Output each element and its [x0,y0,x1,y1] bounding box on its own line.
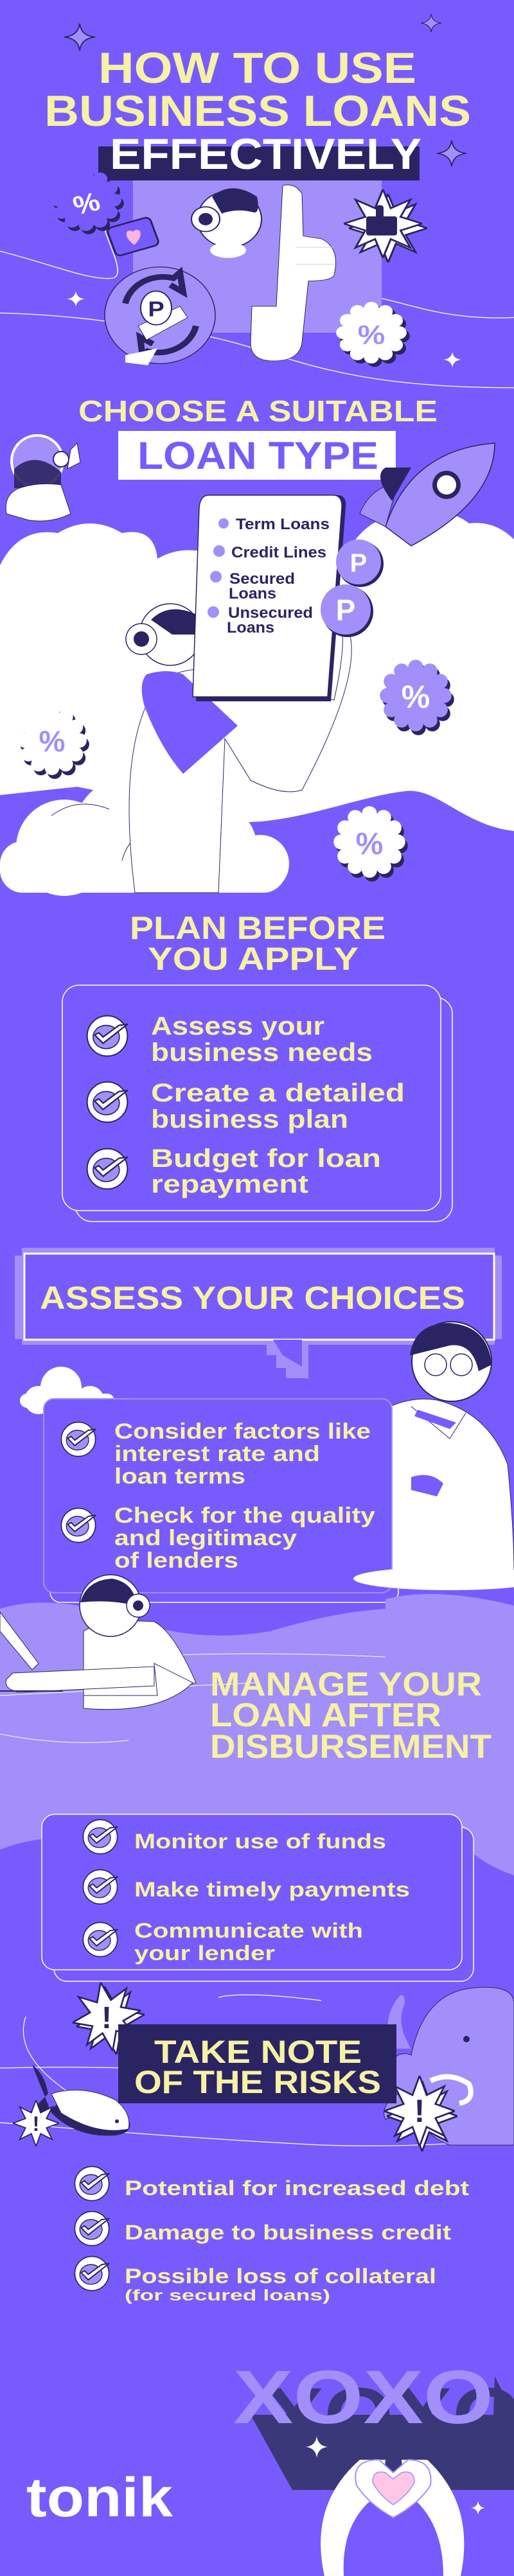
cloud left [20,1367,114,1414]
title: BUSINESS LOANS [44,87,471,136]
icon: coin exchange circle: P [148,297,164,321]
heading: plan before you apply: YOU APPLY [148,941,359,977]
risk: credit: Damage to business credit [125,2221,451,2244]
icon: percent badge light [380,660,454,735]
heading: manage your loan after disbursement: LOAN AFTER [210,1697,441,1734]
item: payments [83,1870,410,1904]
heading box: take note of the risks: OF THE RISKS [134,2064,381,2100]
icon: burst right: ! [414,2093,425,2129]
loan item: credit lines: Credit Lines [231,544,326,561]
illustration: astronaut [6,435,80,521]
item: payments: Make timely payments [134,1878,410,1901]
item: business plan [87,1079,405,1134]
icon: peso coins: P [350,549,367,577]
heading: plan before you apply: PLAN BEFORE [130,910,386,946]
icon: peso coins: P [336,593,355,627]
loan item: unsecured loans: Unsecured [228,604,313,622]
item: communicate: Communicate with [134,1919,363,1942]
icon: percent badge white [336,302,410,367]
heading: manage your loan after disbursement: DISBURSEMENT [210,1728,492,1766]
risk: collateral: (for secured loans) [125,2287,330,2304]
icon: coin exchange circle [105,267,215,365]
icon: heart bubble [107,216,159,256]
illustration: fish [29,2065,130,2136]
icon: burst top left [66,1976,151,2061]
heading: choose a suitable: CHOOSE A SUITABLE [78,394,438,428]
loan item: term loans: Term Loans [236,516,330,533]
item: check lenders: Check for the quality [114,1503,375,1528]
item: consider factors: interest rate and [114,1442,320,1466]
title [44,44,471,188]
icon: burst small left [13,2100,59,2146]
item: budget: repayment [151,1170,308,1198]
icon: peso coins [321,539,384,637]
xoxo: XOXO [265,2372,514,2457]
loan item: secured loans [210,570,295,602]
icon: percent badge navy [51,170,124,234]
item: business plan: Create a detailed [151,1079,405,1107]
decorative wavy lines top [0,219,514,388]
icon: burst right [384,2076,457,2151]
item: check lenders: of lenders [114,1548,238,1573]
panel: plan before you apply [62,985,452,1222]
icon: sparkle bottom [306,2436,485,2515]
speech bubble heading: assess your choices [15,1248,502,1378]
loan item: secured loans: Loans [229,585,276,602]
heading box: loan type: LOAN TYPE [137,434,378,477]
decorative lines risks [0,1995,514,2146]
loan item: unsecured loans: Loans [227,619,274,636]
item: budget [87,1144,381,1198]
title: HOW TO USE [98,44,416,92]
icon: thumbs up star [344,189,427,263]
heading box: take note of the risks: TAKE NOTE [154,2034,362,2070]
list: risks [75,2166,469,2304]
item: consider factors [61,1419,371,1489]
panel: manage your loan [42,1814,474,1981]
item: budget: Budget for loan [151,1144,381,1173]
loan item: secured loans: Secured [229,570,295,588]
item: consider factors: loan terms [114,1464,245,1489]
sparkles top [64,14,466,367]
icon: percent badge white: % [358,319,385,350]
icon: percent badge white left: % [39,724,65,758]
risk: debt [75,2166,469,2201]
xoxo [233,2355,514,2490]
title: EFFECTIVELY [103,139,414,188]
icon: percent badge white bottom: % [356,827,383,861]
light purple wave band [0,1567,514,1875]
item: consider factors: Consider factors like [114,1419,371,1444]
illustration: heart hands [321,2460,464,2576]
item: check lenders [61,1503,375,1573]
xoxo: XOXO [233,2355,493,2440]
heading: plan before you apply [130,910,386,977]
item: assess needs: business needs [151,1038,373,1067]
risk: debt: Potential for increased debt [125,2177,469,2200]
item: communicate: your lender [134,1941,275,1965]
phone with loan types [193,495,346,701]
risk: collateral: Possible loss of collateral [125,2265,436,2288]
item: communicate [83,1919,363,1965]
panel: assess your choices [44,1399,398,1602]
icon: percent badge navy: % [69,187,103,221]
item: assess needs: Assess your [151,1012,324,1040]
icon: percent badge light: % [402,679,430,715]
item: business plan: business plan [151,1105,348,1134]
item: check lenders: and legitimacy [114,1526,297,1550]
heading box: take note of the risks [118,2024,396,2103]
illustration: rocket [360,443,495,546]
illustration: head with headphones [191,188,261,258]
title: EFFECTIVELY [110,130,421,179]
illustration: person holding phone [126,604,351,893]
illustration: octopus [359,1987,514,2145]
illustration: pointing hand [251,185,335,361]
heading: manage your loan after disbursement: MANAGE YOUR [210,1666,482,1703]
icon: burst top left: ! [102,2001,112,2035]
item: monitor [83,1819,386,1854]
risk: credit [75,2211,451,2246]
speech bubble heading: assess your choices: ASSESS YOUR CHOICES [40,1280,465,1316]
illustration: person at computer [0,1575,196,1710]
item: monitor: Monitor use of funds [134,1830,386,1853]
loan item: unsecured loans [208,604,313,636]
icon: percent badge white bottom [333,806,408,882]
icon: percent badge white left [17,706,89,779]
icon: burst small left: ! [33,2112,39,2135]
item: assess needs [87,1012,373,1067]
heading: manage your loan after disbursement [210,1666,492,1766]
illustration: person with glasses [360,1322,514,1573]
logo: tonik: tonik [26,2467,173,2528]
white clouds background [0,513,514,896]
illustration: light square background [133,180,382,333]
risk: collateral [75,2256,436,2304]
